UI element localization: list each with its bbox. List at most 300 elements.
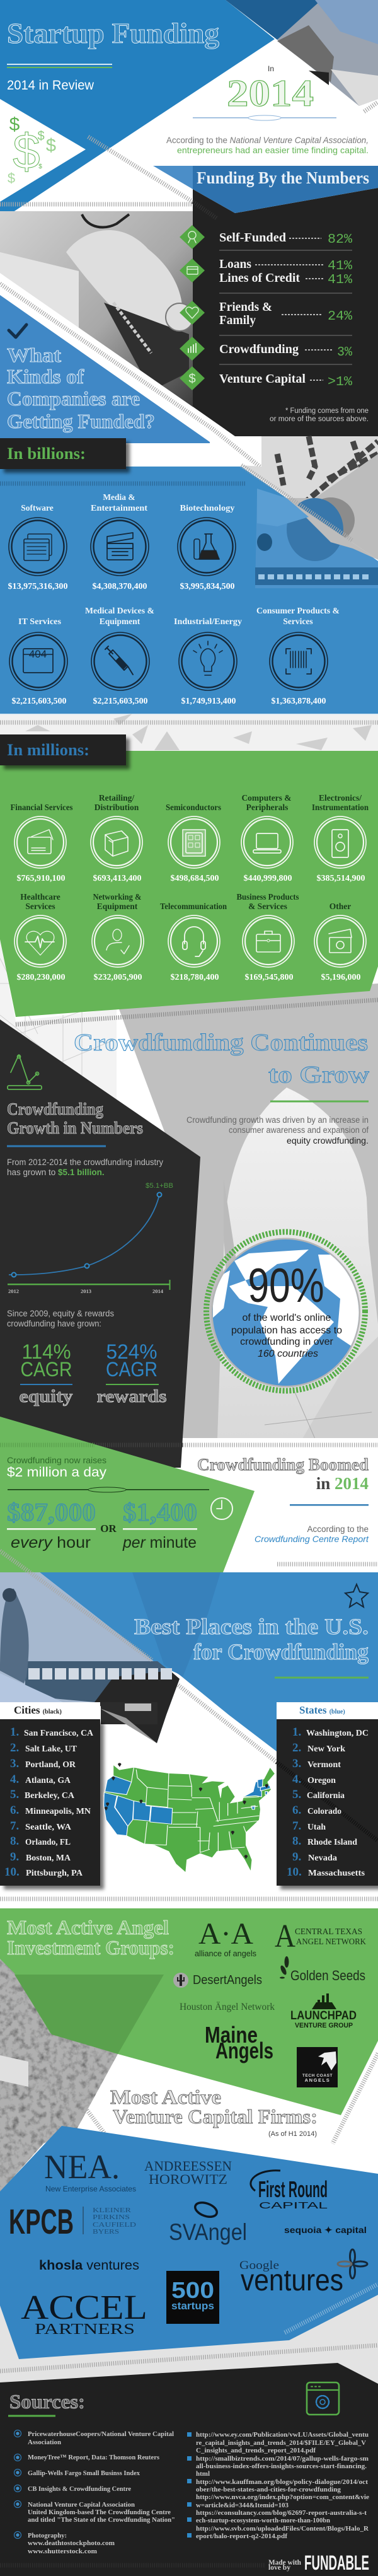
- category: it services: [9, 617, 67, 705]
- stat: per minute: [122, 1498, 197, 1552]
- crowdfunding numbers panel: has grown to $5.1 billion.: [7, 1168, 105, 1177]
- city photo: [0, 1572, 180, 1743]
- sources right: ech-startup-ecosystem-worth-more-than-100bn: [196, 2517, 330, 2524]
- in billions label: [0, 438, 126, 469]
- pale divider strip: [0, 714, 378, 751]
- white band: [0, 273, 378, 560]
- intro: in 2014: According to the National Venture Capital Association,: [166, 135, 369, 145]
- category: retailing: Retailing/: [99, 793, 134, 803]
- what kinds section: [0, 273, 378, 560]
- logo: 500 startups: [166, 2271, 219, 2324]
- arch: [217, 1088, 378, 1439]
- category: medical: [85, 606, 154, 705]
- heading: for Crowdfunding: [193, 1639, 369, 1664]
- logo: kpcb: KLEINER: [93, 2207, 132, 2214]
- sources left: [28, 2430, 175, 2555]
- funding by the numbers panel: Funding By the Numbers: [197, 168, 369, 187]
- logo: maine angels: Angels: [215, 2038, 273, 2063]
- 2 million a day panel: $2 million a day: [7, 1465, 107, 1480]
- sources left: PricewaterhouseCoopers/National Venture Capital: [28, 2430, 174, 2438]
- sources right: re_capital_insights_and_trends_2014/$FILE/EY_Global_V: [196, 2439, 366, 2447]
- category: financial: $765,910,100: [16, 873, 66, 883]
- 90 percent: 90%: [248, 1259, 324, 1313]
- sources right: [196, 2431, 369, 2540]
- dollar signs triangle: $: [9, 114, 20, 135]
- crowdfunding boomed section: [0, 1438, 378, 1572]
- percentages: 82%: [328, 233, 352, 247]
- category: other: Other: [329, 902, 351, 911]
- logo: golden seeds: [279, 1956, 365, 1983]
- category: other: [314, 902, 366, 982]
- logo: google ventures: ventures: [241, 2264, 343, 2297]
- logo: sv angel: SVAngel: [169, 2219, 247, 2245]
- stat: per minute: $1,400: [123, 1498, 197, 1526]
- category: consumer: Services: [283, 617, 313, 626]
- globe text: [231, 1313, 342, 1359]
- category: medical: $2,215,603,500: [93, 696, 148, 705]
- category: electronics: Electronics/: [319, 793, 362, 803]
- percentages: 3%: [337, 345, 352, 360]
- rank numbers: 10.: [4, 1865, 20, 1879]
- funding rows: Friends &: [219, 300, 272, 314]
- logo: central texas: [275, 1918, 366, 1954]
- category: telecommunication: $218,780,400: [170, 972, 219, 982]
- rank numbers: 1.: [10, 1726, 19, 1739]
- heading: what kinds: Getting Funded?: [7, 410, 155, 432]
- logo: launchpad: VENTURE GROUP: [295, 2022, 353, 2029]
- dollar signs triangle: [0, 99, 86, 202]
- states panel: [277, 1702, 378, 1886]
- logo: first round: [251, 2171, 328, 2211]
- heading: Sources:: [9, 2390, 85, 2413]
- category: software: $13,975,316,300: [8, 581, 68, 591]
- people ring: [207, 1232, 365, 1391]
- stat: equity: [19, 1340, 73, 1407]
- heading: Investment Groups:: [7, 1936, 175, 1959]
- logo: sequoia: sequoia ✦ capital: [284, 2225, 367, 2235]
- in millions label: [0, 734, 126, 765]
- heading: what kinds: What: [7, 344, 61, 366]
- category: biotechnology: Biotechnology: [180, 503, 235, 513]
- state names: New York: [307, 1744, 346, 1753]
- category: media: Entertainment: [91, 503, 148, 513]
- logo: 500 startups: 500: [171, 2277, 214, 2303]
- logo: alliance of angels: A·A: [198, 1917, 253, 1951]
- rank numbers: 4.: [10, 1773, 19, 1786]
- category: biotechnology: [178, 503, 236, 591]
- rank numbers: 8.: [292, 1835, 301, 1848]
- category: financial: [10, 803, 73, 883]
- logo: tech coast angels: [297, 2047, 338, 2087]
- funding by the numbers panel: [153, 166, 378, 436]
- line chart: $5.1+BB: [146, 1182, 173, 1190]
- heading: [7, 1099, 143, 1137]
- city names: Portland, OR: [25, 1760, 76, 1769]
- funding by the numbers panel: or more of the sources above.: [270, 415, 369, 423]
- crowdfunding intro: Crowdfunding growth was driven by an increase in: [186, 1115, 369, 1125]
- dollar signs triangle: $: [37, 129, 45, 143]
- sources left: and titled "The State of the Crowdfunding Nation": [28, 2516, 175, 2524]
- growth text: From 2012-2014 the crowdfunding industry: [7, 1157, 163, 1167]
- state names: Rhode Island: [307, 1837, 357, 1847]
- category: healthcare: [14, 892, 66, 982]
- sources right: all-business-index-offers-insights-sources-start-financing.: [196, 2463, 367, 2470]
- percentages: 24%: [328, 310, 352, 324]
- globe text: of the world's online: [243, 1313, 331, 1323]
- sources right: html: [196, 2470, 210, 2478]
- line chart: [8, 1182, 173, 1294]
- intro: in 2014: entrepreneurs had an easier time finding capital.: [177, 145, 369, 155]
- state names: Washington, DC: [306, 1728, 369, 1738]
- category: healthcare: Services: [25, 902, 55, 911]
- icon: settings window: [307, 2382, 339, 2415]
- divider: [8, 1487, 209, 1492]
- globe text: population has access to: [231, 1325, 342, 1336]
- blue background: [40, 1572, 378, 1751]
- state names: Massachusetts: [308, 1868, 365, 1877]
- 2 million a day panel: [0, 1417, 255, 1572]
- crowdfunding heading: [74, 1030, 370, 1146]
- logo: golden seeds: Golden Seeds: [290, 1968, 365, 1983]
- sources right: eport/halo-report-q2-2014.pdf: [196, 2532, 287, 2540]
- us map: [104, 1763, 275, 1872]
- category: business products: Business Products: [237, 892, 299, 902]
- sources left: www.deathtostockphoto.com: [28, 2539, 115, 2547]
- funding by the numbers panel: $: [188, 372, 196, 386]
- blue states: [104, 1776, 270, 1836]
- sources right: C_insights_and_trends_report_2014.pdf: [196, 2447, 316, 2454]
- heading: Best Places in the U.S.: [134, 1614, 369, 1639]
- globe: [212, 1239, 365, 1386]
- category: financial: Financial Services: [10, 803, 73, 812]
- intro: in 2014: In: [268, 64, 274, 73]
- sources right: http://www.kauffman.org/blogs/policy-dialogue/2014/oct: [196, 2478, 368, 2486]
- category: it services: $2,215,603,500: [11, 696, 67, 705]
- heading: [134, 1614, 369, 1664]
- category: healthcare: Healthcare: [20, 892, 60, 902]
- sources left: Photography:: [28, 2532, 67, 2539]
- heading: what kinds: Companies are: [7, 387, 140, 410]
- category: consumer: Consumer Products &: [256, 606, 340, 615]
- rank numbers: 4.: [292, 1773, 301, 1786]
- logo: tech coast angels: ANGELS: [305, 2077, 330, 2083]
- category: medical: Equipment: [100, 617, 140, 626]
- state names: Vermont: [307, 1760, 341, 1769]
- category: medical: Medical Devices &: [85, 606, 154, 615]
- blue title panel: [0, 0, 275, 221]
- category: healthcare: $280,230,000: [16, 972, 66, 982]
- line chart: 2013: [81, 1288, 91, 1294]
- city names: Seattle, WA: [25, 1822, 71, 1831]
- stat: rewards: 524%: [106, 1340, 158, 1363]
- category: industrial: $1,749,913,400: [181, 696, 236, 705]
- venture capital heading: Most Active: [110, 2086, 221, 2108]
- category: media: $4,308,370,400: [92, 581, 147, 591]
- footnote: * Funding comes from one: [285, 407, 369, 415]
- stat: equity: CAGR: [20, 1358, 72, 1381]
- heading: Crowdfunding Boomed: [197, 1455, 369, 1474]
- crowdfunding intro: equity crowdfunding.: [287, 1136, 369, 1146]
- logo: andreessen horowitz: ANDREESSEN: [144, 2158, 232, 2174]
- sources right: http://www.svb.com/uploadedFiles/Content/Blogs/Halo_R: [196, 2525, 369, 2532]
- icon: growth chart: [8, 1055, 42, 1089]
- stat: per minute: per minute: [122, 1534, 197, 1552]
- logo: central texas: A: [275, 1918, 295, 1954]
- category: networking: [92, 892, 144, 982]
- sources left: United Kingdom-based The Crowdfunding Centre: [28, 2509, 171, 2516]
- sources right: ober/the-best-states-and-cities-for-crowdfunding: [196, 2486, 341, 2493]
- category: semiconductors: $498,684,500: [170, 873, 219, 883]
- heading: what kinds: Kinds of: [7, 365, 84, 388]
- icon: star: [345, 1584, 368, 1607]
- heading: in 2014: [316, 1474, 369, 1493]
- category: computers: $440,999,800: [243, 873, 292, 883]
- category: industrial: [174, 617, 242, 705]
- map pins: [105, 1763, 268, 1859]
- sources left: www.shutterstock.com: [28, 2548, 97, 2555]
- stat: per hour: [7, 1498, 96, 1552]
- category: telecommunication: Telecommunication: [160, 902, 227, 911]
- category: it services: IT Services: [18, 617, 61, 626]
- city names: [24, 1728, 93, 1877]
- rank numbers: 5.: [292, 1788, 301, 1801]
- heading: what kinds: [7, 344, 155, 432]
- rank numbers: [4, 1726, 20, 1879]
- state names: Oregon: [307, 1775, 336, 1785]
- logo: launchpad: LAUNCHPAD: [290, 2009, 357, 2022]
- logo: khosla: khosla ventures: [39, 2258, 139, 2273]
- logo: launchpad: [290, 1993, 357, 2029]
- logo: desert angels: DesertAngels: [193, 1973, 262, 1987]
- venture capital heading: (As of H1 2014): [268, 2130, 317, 2138]
- 2 million a day panel: Crowdfunding now raises: [7, 1455, 106, 1465]
- made with love by fundable: Made with: [268, 2559, 302, 2567]
- category: it services: 404: [29, 648, 47, 660]
- rank numbers: 5.: [10, 1788, 19, 1801]
- category: media: Media &: [103, 492, 135, 502]
- category: computers: Computers &: [241, 793, 292, 803]
- dashes: [255, 238, 332, 380]
- dollar signs triangle: $: [38, 163, 42, 170]
- category: business products: $169,545,800: [244, 972, 294, 982]
- rank numbers: 6.: [10, 1804, 19, 1817]
- title: Startup Funding: [7, 17, 219, 49]
- sources right: https://econsultancy.com/blog/62697-report-australia-s-t: [196, 2509, 367, 2517]
- category: electronics: Instrumentation: [312, 803, 369, 812]
- money photo: [241, 436, 378, 588]
- funding rows: Crowdfunding: [219, 342, 299, 356]
- category: networking: $232,005,900: [93, 972, 142, 982]
- percentages: 41%: [328, 259, 352, 274]
- globe stat: [207, 1232, 365, 1391]
- rank numbers: 10.: [287, 1865, 302, 1879]
- stat: per hour: $87,000: [7, 1498, 96, 1526]
- sources right: w=article&id=344&Itemid=103: [196, 2502, 289, 2509]
- category: software: Software: [21, 503, 54, 513]
- logo: tech coast angels: TECH COAST: [302, 2074, 333, 2078]
- made with love by fundable: love by: [268, 2564, 290, 2572]
- rank numbers: 8.: [10, 1835, 19, 1848]
- pale background: [0, 2276, 378, 2396]
- in billions panel: [0, 436, 378, 714]
- crowdfunding numbers panel: crowdfunding have grown:: [7, 1319, 101, 1328]
- category: media: [91, 492, 149, 591]
- stat: equity: equity: [19, 1387, 73, 1407]
- category: biotechnology: $3,995,834,500: [180, 581, 235, 591]
- logo: desert angels: [173, 1973, 262, 1988]
- category: computers: [241, 793, 293, 883]
- green panel: [0, 1908, 378, 2115]
- funding rows: Lines of Credit: [219, 271, 300, 285]
- states panel: States (blue): [299, 1704, 345, 1716]
- rank numbers: 2.: [292, 1741, 301, 1755]
- in billions label: In billions:: [7, 444, 86, 463]
- category: semiconductors: Semiconductors: [166, 803, 221, 812]
- source: According to the: [307, 1524, 369, 1534]
- funding rows: Loans: [219, 257, 251, 271]
- category: consumer: $1,363,878,400: [271, 696, 326, 705]
- category: retailing: Distribution: [94, 803, 139, 812]
- heading: Most Active Angel: [7, 1916, 169, 1939]
- sources left: National Venture Capital Association: [28, 2501, 135, 2509]
- logo: central texas: CENTRAL TEXAS: [295, 1927, 362, 1937]
- logo: maine angels: [205, 2022, 273, 2063]
- blue background: [0, 467, 378, 714]
- category: other: $5,196,000: [321, 972, 361, 982]
- logo: nea: New Enterprise Associates: [45, 2184, 136, 2193]
- rank numbers: 9.: [10, 1850, 19, 1864]
- logo: central texas: ANGEL NETWORK: [296, 1937, 366, 1947]
- angel investment section: [0, 1908, 378, 2192]
- or: OR: [100, 1523, 117, 1535]
- category: business products: [237, 892, 299, 982]
- sources right: http://smallbiztrends.com/2014/07/gallup-wells-fargo-sm: [196, 2455, 369, 2463]
- stat: per hour: every hour: [11, 1534, 91, 1552]
- rank numbers: [287, 1726, 302, 1879]
- sources panel: [0, 2363, 378, 2576]
- stat: rewards: CAGR: [106, 1358, 158, 1381]
- sources right: http://www.ey.com/Publication/vwLUAssets/Global_ventu: [196, 2431, 369, 2439]
- state lines: [132, 1767, 259, 1852]
- city names: Orlando, FL: [25, 1837, 71, 1847]
- category: consumer: [256, 606, 340, 705]
- percentages: [328, 233, 352, 390]
- logo: sv angel: [169, 2200, 247, 2245]
- logo: andreessen horowitz: HOROWITZ: [149, 2171, 227, 2187]
- in millions panel: [0, 734, 378, 1024]
- city names: Berkeley, CA: [25, 1790, 74, 1800]
- icon: check: [9, 325, 26, 337]
- funding rows: Venture Capital: [219, 372, 306, 386]
- logo: alliance of angels: alliance of angels: [195, 1949, 256, 1958]
- bullets right: [187, 2432, 192, 2538]
- rank numbers: 2.: [10, 1741, 19, 1755]
- subtitle: 2014 in Review: [7, 78, 94, 93]
- globe text: 160 countries: [258, 1349, 318, 1359]
- heading: Crowdfunding: [7, 1099, 103, 1118]
- logo: 500 startups: startups: [171, 2300, 214, 2312]
- state names: [306, 1728, 369, 1877]
- hero photo: [226, 0, 378, 106]
- icon: clock: [211, 1498, 232, 1519]
- funding rows: [219, 231, 306, 386]
- category: networking: Equipment: [97, 902, 138, 911]
- logo: accel: PARTNERS: [35, 2321, 135, 2338]
- logo: andreessen horowitz: [144, 2158, 232, 2187]
- dollar signs triangle: $: [8, 170, 15, 186]
- rank numbers: 7.: [292, 1819, 301, 1833]
- funding rows: Self-Funded: [219, 231, 286, 245]
- category: software: [8, 503, 68, 591]
- logo: maine angels: Maine: [205, 2022, 258, 2048]
- hatch: [88, 137, 193, 202]
- logo: first round: CAPITAL: [259, 2200, 328, 2211]
- heading: Growth in Numbers: [7, 1118, 143, 1137]
- logo: kpcb: BYERS: [93, 2228, 119, 2236]
- rank numbers: 1.: [292, 1726, 301, 1739]
- city names: Salt Lake, UT: [25, 1744, 77, 1753]
- state names: California: [307, 1790, 345, 1800]
- category: retailing: $693,413,400: [93, 873, 142, 883]
- heading: [7, 1916, 175, 1959]
- percentages: >1%: [328, 375, 352, 390]
- dollar signs triangle: $: [13, 124, 40, 179]
- crowdfunding boomed section: Crowdfunding Centre Report: [255, 1535, 369, 1544]
- diamond glyphs: [186, 231, 198, 352]
- best places section: [0, 1551, 378, 1841]
- city names: Minneapolis, MN: [25, 1806, 91, 1816]
- city names: San Francisco, CA: [24, 1728, 93, 1738]
- logo: google ventures: Google: [239, 2259, 279, 2272]
- venture capital panel: [0, 2126, 378, 2359]
- desk photo: [0, 211, 193, 410]
- rank numbers: 9.: [292, 1850, 301, 1864]
- intro: in 2014: [166, 64, 369, 155]
- cities panel: Cities (black): [14, 1704, 62, 1716]
- venture capital heading: [110, 2086, 318, 2138]
- city names: Boston, MA: [26, 1853, 71, 1862]
- rank numbers: 3.: [292, 1757, 301, 1770]
- crowdfunding intro: consumer awareness and expansion of: [229, 1125, 369, 1135]
- crowdfunding heading: to Grow: [268, 1062, 370, 1088]
- rank numbers: 3.: [10, 1757, 19, 1770]
- since 2009 text: Since 2009, equity & rewards: [7, 1309, 114, 1318]
- state names: Colorado: [307, 1806, 341, 1816]
- category: business products: & Services: [248, 902, 287, 911]
- line chart: 2012: [8, 1288, 19, 1294]
- logo: kpcb: KPCB: [9, 2202, 74, 2241]
- stat: rewards: [97, 1340, 167, 1407]
- rank numbers: 6.: [292, 1804, 301, 1817]
- sources right: http://www.nvca.org/index.php?option=com_content&vie: [196, 2493, 369, 2501]
- intro: in 2014: 2014: [227, 73, 314, 114]
- title rule: [7, 64, 112, 68]
- category: telecommunication: [160, 902, 227, 982]
- cities panel: [0, 1702, 100, 1886]
- in millions label: In millions:: [7, 741, 89, 759]
- line chart: 2014: [152, 1288, 164, 1294]
- stat: rewards: rewards: [97, 1387, 167, 1407]
- venture capital heading: Venture Capital Firms:: [113, 2105, 318, 2128]
- city names: Pittsburgh, PA: [26, 1868, 83, 1877]
- category: retailing: [91, 793, 142, 883]
- funding rows: Family: [219, 313, 256, 327]
- logo: accel: ACCEL: [21, 2288, 147, 2326]
- sources left: MoneyTree™ Report, Data: Thomson Reuters: [28, 2454, 160, 2461]
- stat: equity: 114%: [21, 1340, 71, 1363]
- crowdfunding heading: Crowdfunding Continues: [74, 1030, 368, 1056]
- logo: houston angel network: Houston Ängel Network: [180, 2001, 275, 2012]
